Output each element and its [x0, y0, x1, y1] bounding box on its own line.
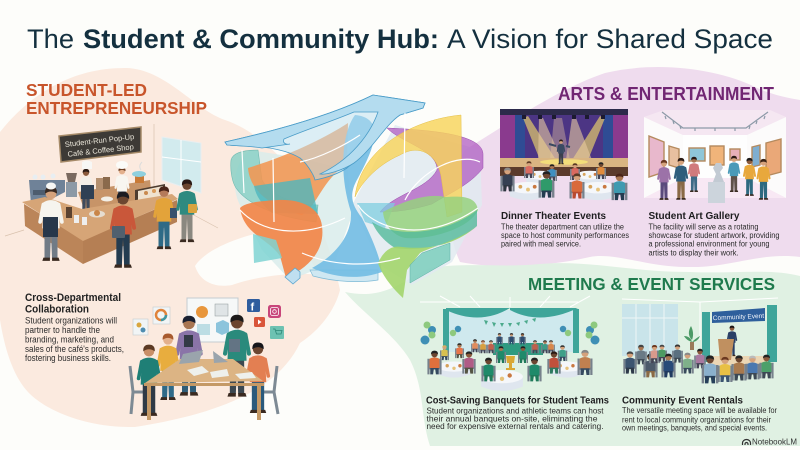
- text block: student art gallery: showcase for student artwork, providing: [648, 231, 780, 240]
- panel: arts background blob: [449, 67, 800, 267]
- person seated green: [139, 345, 159, 416]
- text block: dinner theater events: space to host community performances: [501, 231, 629, 240]
- orange lower form: [240, 200, 322, 278]
- text block: community event rentals: Community Event Rentals: [622, 396, 743, 406]
- text block: cross-departmental collaboration: fostering business skills.: [25, 353, 111, 363]
- text block: student art gallery: artists to display their work.: [648, 248, 738, 257]
- text block: cross-departmental collaboration: Collaboration: [25, 304, 89, 316]
- truss: [500, 109, 628, 119]
- green fin: [378, 226, 477, 298]
- top slab glass: [225, 95, 425, 180]
- front tables: [510, 182, 616, 200]
- purple ribbon: [380, 128, 483, 212]
- central blue hourglass: [312, 115, 382, 277]
- performer: [549, 140, 570, 164]
- text block: dinner theater events: The theater department can utilize the: [501, 222, 624, 232]
- guests: [427, 343, 592, 375]
- text block: cost-saving banquets: Cost-Saving Banquets for Student Teams: [426, 396, 609, 406]
- speaker: [728, 326, 736, 356]
- head table: [493, 333, 543, 355]
- pedestal and sculpture: [708, 163, 725, 203]
- badge: NotebookLM: NotebookLM: [752, 436, 797, 446]
- text block: student art gallery: The facility will serve as a rotating: [648, 222, 758, 232]
- plant: [684, 326, 700, 350]
- ring left teal: [231, 150, 318, 222]
- customer teal: [178, 179, 197, 242]
- text block: dinner theater events: paired with meal service.: [501, 240, 581, 248]
- bottom slab: [285, 268, 300, 284]
- heading: arts and entertainment: ARTS & ENTERTAINMENT: [558, 83, 775, 104]
- text block: cost-saving banquets: their annual banquets on-site, eliminating the: [426, 413, 598, 423]
- title: A Vision for Shared Space: [447, 24, 773, 54]
- window: [162, 137, 201, 193]
- audience seated: [524, 161, 606, 181]
- illustration: collaboration team around table: [130, 298, 284, 420]
- text block: student art gallery: a professional environment for young: [648, 240, 770, 249]
- balloons: [420, 322, 600, 344]
- illustration: cafe pop-up scene: [5, 124, 218, 268]
- ceiling: [644, 110, 786, 135]
- audience left: [623, 345, 706, 377]
- text block: community event rentals: rent to local community organizations for their: [622, 416, 771, 424]
- glass underlay left: [235, 150, 352, 280]
- table: [144, 350, 264, 420]
- front diners: [500, 168, 627, 200]
- banner: community event: [712, 308, 765, 323]
- title: [27, 24, 773, 54]
- glass underlay right: [352, 125, 482, 285]
- pastry case: [135, 184, 165, 207]
- stage platform: [708, 356, 768, 365]
- jars: [96, 177, 110, 190]
- yellow arc: [355, 115, 462, 217]
- teal green band: [372, 210, 477, 249]
- side tables: [438, 362, 583, 391]
- illustration: dinner theater stage: [500, 109, 628, 200]
- top slab opaque rim: [225, 95, 425, 174]
- podium: [718, 339, 734, 360]
- customer yellow: [155, 186, 177, 249]
- text block: dinner theater events: [501, 211, 629, 248]
- text block: cost-saving banquets: Student organizations and athletic teams can host: [426, 406, 604, 416]
- espresso machine: [29, 174, 65, 204]
- icon: video: [254, 317, 265, 327]
- gallery walls and floor: [644, 117, 786, 198]
- curtains: [702, 305, 777, 362]
- icon: gears bubble: [133, 319, 148, 335]
- text block: community event rentals: [622, 396, 777, 433]
- bunting: [484, 318, 536, 327]
- audience right backs: [702, 355, 774, 383]
- barista with hat: [80, 160, 94, 211]
- text block: cross-departmental collaboration: partner to handle the: [25, 325, 100, 335]
- illustration: central hub glass structure: [225, 95, 483, 298]
- paintings: [649, 136, 781, 177]
- back tables and diners: [526, 171, 604, 185]
- person seated yellow: [158, 333, 178, 400]
- windows: [446, 310, 576, 352]
- curtains and swags: [443, 308, 579, 353]
- team at front table: [481, 346, 542, 381]
- back counter: [78, 180, 152, 212]
- text block: community event rentals: The versatile meeting space will be available for: [622, 406, 777, 415]
- chairs: [130, 366, 278, 414]
- heading: student-led entrepreneurship: STUDENT-LED: [26, 80, 147, 100]
- icon: facebook: f: [250, 302, 254, 314]
- text block: cross-departmental collaboration: Student organizations will: [25, 316, 117, 326]
- title: Student & Community Hub:: [83, 24, 439, 54]
- text block: student art gallery: Student Art Gallery: [648, 211, 740, 222]
- person standing teal: [225, 315, 249, 397]
- heading: meeting and event services: MEETING & EVENT SERVICES: [528, 274, 775, 294]
- text block: cost-saving banquets: [426, 396, 609, 431]
- sign: student-run pop-up cafe: Student-Run Pop-Up: [64, 132, 135, 149]
- heading: student-led entrepreneurship: [26, 80, 207, 118]
- main counter: [22, 194, 178, 264]
- stage floor: [500, 158, 628, 176]
- teal inner core: [254, 178, 318, 214]
- white notch in student-led blob: [195, 230, 318, 286]
- sign: student-run pop-up cafe: Café & Coffee Shop: [67, 142, 134, 159]
- icon: cart: [270, 326, 284, 339]
- teal lower panels: [410, 243, 450, 283]
- text block: cross-departmental collaboration: Cross-Departmental: [25, 292, 121, 304]
- illustration: banquet hall: [420, 296, 600, 391]
- text block: cost-saving banquets: need for expensive external rentals and catering.: [426, 421, 604, 431]
- customer red jacket: [112, 192, 134, 268]
- visitors: [658, 156, 769, 200]
- curtains: [500, 115, 628, 163]
- lower blue ring: [310, 270, 378, 282]
- panel: meeting background blob: [345, 263, 800, 446]
- spotlights: [523, 116, 605, 160]
- track lights: [662, 112, 768, 131]
- heading: student-led entrepreneurship: ENTREPRENEURSHIP: [26, 98, 207, 118]
- green platform: [383, 196, 478, 238]
- title: The: [27, 24, 74, 54]
- steaming cup: [132, 162, 146, 183]
- barista in front: [40, 182, 62, 261]
- orange top block: [248, 123, 348, 215]
- glass poles and frame lines: [240, 113, 480, 264]
- chef: [116, 161, 128, 211]
- illustration: student art gallery: [644, 110, 786, 203]
- presentation board: [187, 298, 238, 342]
- illustration: community event room: [622, 298, 778, 383]
- text block: cross-departmental collaboration: branding, marketing, and: [25, 334, 114, 344]
- trophy: [506, 356, 515, 370]
- person standing purple: [177, 316, 201, 396]
- person seated orange: [248, 343, 268, 413]
- icon: facebook: [247, 299, 260, 314]
- back row guests: [471, 339, 555, 353]
- text block: community event rentals: own meetings, banquets, and special events.: [622, 424, 767, 433]
- teal panel lower left: [253, 234, 282, 263]
- center blue glow: [357, 203, 395, 228]
- windows: [622, 304, 678, 356]
- sign: student-run pop-up cafe: [59, 127, 141, 162]
- banner: community event: Community Event: [713, 313, 764, 322]
- text block: dinner theater events: Dinner Theater Events: [501, 211, 606, 222]
- text block: cross-departmental collaboration: [25, 292, 124, 363]
- grinder: [66, 173, 77, 197]
- counter cups and plate: [66, 196, 113, 225]
- text block: cross-departmental collaboration: sales of the café's products,: [25, 344, 124, 354]
- text block: student art gallery: [648, 211, 780, 257]
- icon: instagram: [268, 305, 281, 318]
- panel: student-led background blob: [0, 68, 340, 427]
- icon: chart bubble: [153, 307, 170, 324]
